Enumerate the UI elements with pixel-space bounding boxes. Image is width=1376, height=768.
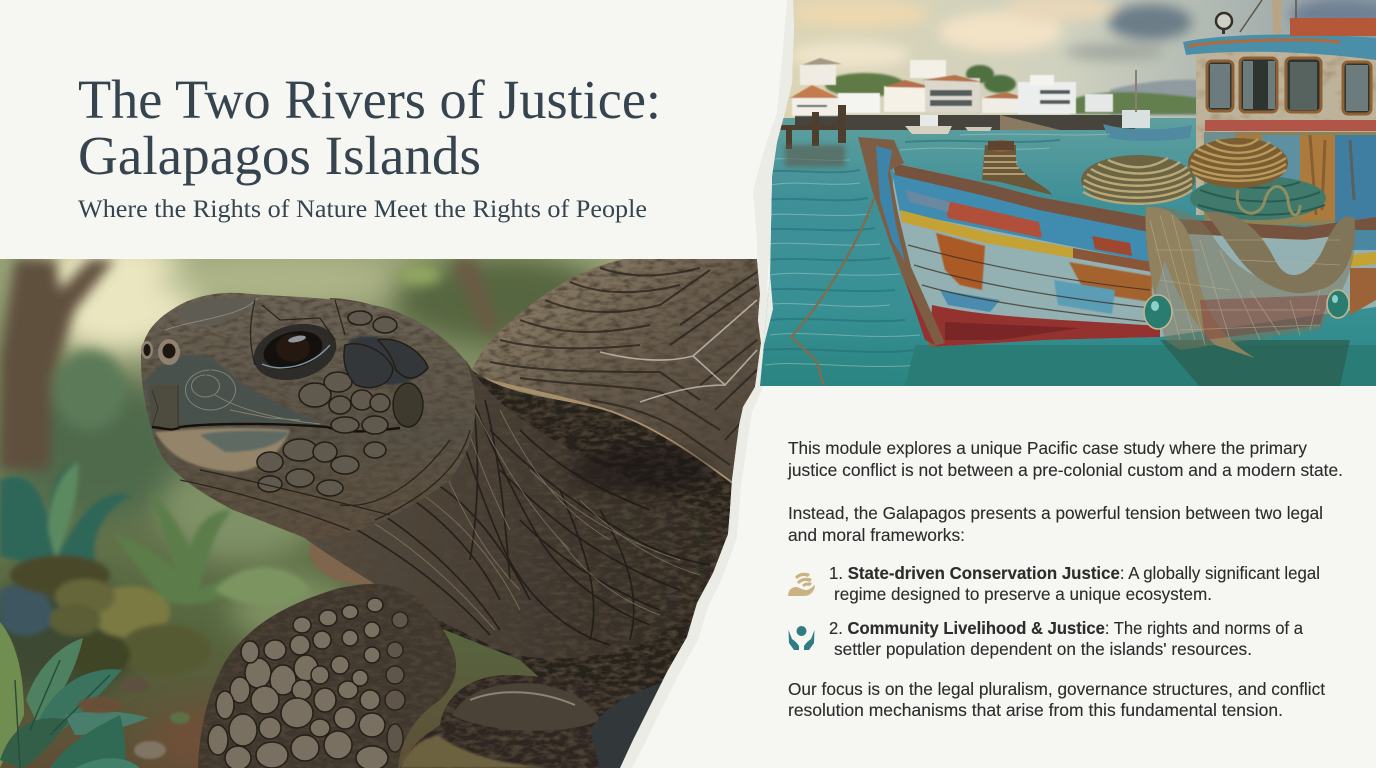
text: focus statement: resolution mechanisms that arise from this fundamental tension.	[788, 700, 1283, 720]
foreground leaves	[0, 622, 148, 768]
text: focus statement: Our focus is on the legal pluralism, governance structures, and conflict	[788, 679, 1325, 699]
text: introduction: This module explores a unique Pacific case study where the primary	[788, 438, 1307, 458]
eye	[254, 324, 336, 380]
torn paper edge: tortoise side	[620, 259, 775, 768]
list item 2: settler population dependent on the islands' resources.	[834, 639, 1252, 659]
text: focus statement	[788, 679, 1325, 720]
text: tension statement: Instead, the Galapagos presents a powerful tension between two legal	[788, 503, 1323, 523]
weathered planks	[936, 233, 985, 290]
icon: hand holding nature	[788, 573, 815, 596]
distant hills and shore	[795, 65, 1200, 130]
red lower hull	[930, 305, 1160, 347]
top strake	[892, 172, 1149, 262]
tortoise body and neck	[230, 298, 770, 768]
list item 1: 1. State-driven Conservation Justice: A globally significant legal	[829, 563, 1320, 583]
tortoise head	[141, 293, 475, 540]
yellow rail	[900, 210, 1073, 258]
photo: giant tortoise in forest	[0, 237, 770, 768]
list item 1	[829, 563, 1320, 604]
water reflection	[905, 345, 1376, 387]
list item 2	[829, 618, 1303, 659]
harbour buildings	[790, 58, 1113, 116]
icon: hands supporting a person	[788, 626, 814, 650]
right hull	[1350, 230, 1376, 250]
gunwale rail	[893, 163, 1376, 240]
tortoise rear foot	[400, 675, 670, 768]
text: introduction	[787, 438, 1343, 480]
nostrils	[141, 339, 180, 365]
text: tension statement: and moral frameworks:	[788, 525, 965, 545]
boat hull	[858, 137, 1376, 347]
text: tension statement	[788, 503, 1323, 545]
list item 2: 2. Community Livelihood & Justice: The rights and norms of a	[829, 618, 1303, 638]
tortoise shell	[470, 259, 770, 486]
bow post	[858, 137, 945, 347]
distant boats	[905, 70, 1192, 141]
list item 1: regime designed to preserve a unique ecosystem.	[834, 584, 1212, 604]
body copy	[787, 438, 1343, 720]
title	[78, 69, 661, 186]
title: The Two Rivers of Justice:	[78, 69, 661, 130]
rope coils	[982, 138, 1326, 220]
boat cabin	[1183, 0, 1376, 225]
ground stones	[78, 678, 190, 759]
torn paper edge: boat side	[753, 0, 794, 386]
title: Galapagos Islands	[78, 125, 481, 186]
water ripples	[762, 134, 1110, 366]
mooring rope	[791, 198, 874, 385]
subtitle: Where the Rights of Nature Meet the Rights of People	[78, 196, 647, 223]
fishing net	[1144, 207, 1355, 358]
photo: fishing boat in harbour	[760, 0, 1376, 388]
pier	[780, 105, 846, 149]
tortoise front leg	[198, 584, 456, 768]
clouds	[790, 0, 1376, 69]
text: introduction: justice conflict is not between a pre-colonial custom and a modern state.	[787, 460, 1343, 480]
